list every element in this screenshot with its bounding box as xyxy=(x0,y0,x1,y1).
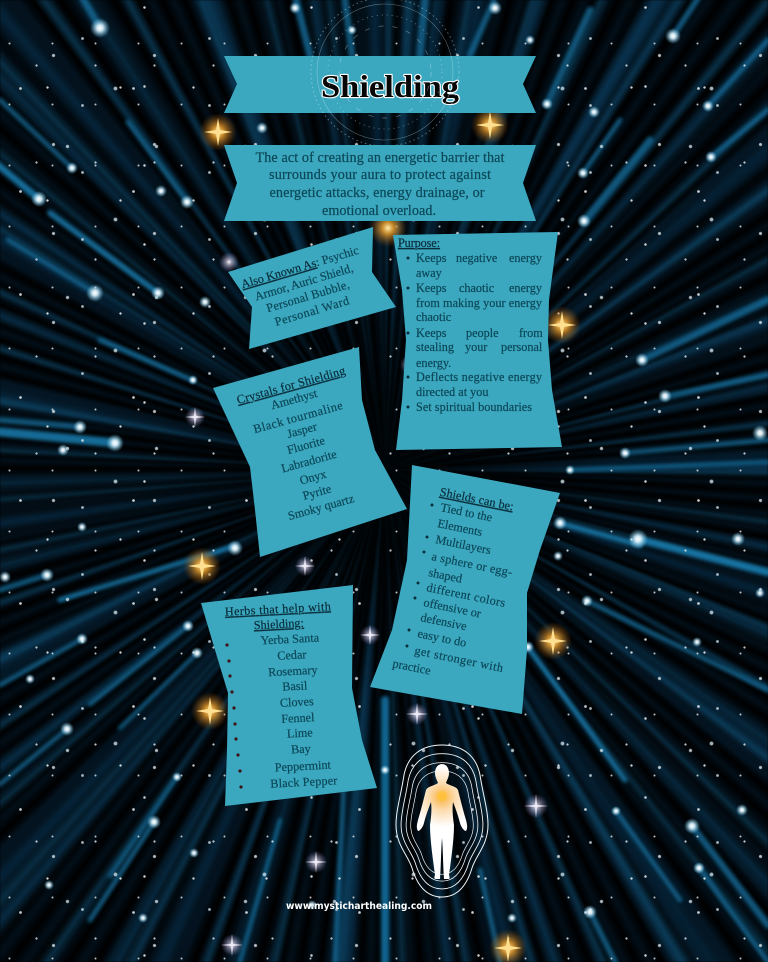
crystals list: Pyrite xyxy=(301,482,333,503)
also known as text: Armor, Auric Shield, xyxy=(253,261,355,303)
icon: gold sparkles xyxy=(183,106,581,962)
crystals list: Jasper xyxy=(285,419,318,441)
shields list: shaped xyxy=(427,565,463,586)
crystals list: Labradorite xyxy=(280,447,338,475)
crystals list: Smoky quartz xyxy=(286,491,356,523)
crystals list: Amethyst xyxy=(269,386,319,412)
purpose list: Keeps xyxy=(416,251,447,265)
crystals list xyxy=(252,386,356,523)
purpose list: away xyxy=(416,266,443,280)
purpose list: directed at you xyxy=(416,385,488,399)
shields list: Multilayers xyxy=(434,532,493,557)
herbs list: Bay xyxy=(291,741,312,757)
purpose list: from xyxy=(519,326,543,340)
figure silhouette xyxy=(417,764,467,879)
definition text: The act of creating an energetic barrier that xyxy=(256,150,505,166)
purpose list: from making your energy xyxy=(416,296,543,310)
purpose list: chaotic xyxy=(459,281,495,295)
decorative mandala circle xyxy=(311,0,459,146)
panel: purpose xyxy=(393,232,562,450)
herbs list xyxy=(225,630,338,791)
panel: crystals xyxy=(213,347,407,557)
also known as text: Personal Bubble, xyxy=(265,277,351,315)
herbs list: Cloves xyxy=(280,694,314,710)
shields list xyxy=(391,500,514,678)
purpose list: energy xyxy=(509,281,543,295)
also known as text: Also Known As: Psychic xyxy=(239,243,361,291)
herbs list: Rosemary xyxy=(268,663,319,679)
panel: herbs xyxy=(201,585,377,806)
purpose list: people xyxy=(466,326,498,340)
definition text: emotional overload. xyxy=(322,203,436,219)
crystals list: Fluorite xyxy=(285,433,326,457)
purpose list: your xyxy=(465,340,487,354)
purpose list: stealing xyxy=(416,340,454,354)
crystals heading: Crystals for Shielding xyxy=(235,363,347,407)
also known as text xyxy=(239,243,361,329)
herbs list: Basil xyxy=(282,678,308,694)
shields list: Elements xyxy=(436,516,484,539)
herbs list: Peppermint xyxy=(274,758,332,774)
shields list: offensive or xyxy=(422,595,482,621)
herbs list: Yerba Santa xyxy=(260,630,320,648)
shields list: different colors xyxy=(425,580,507,610)
purpose list: negative xyxy=(456,251,497,265)
website url: www.mysticharthealing.com xyxy=(286,901,432,912)
icon: violet sparkles xyxy=(185,252,548,956)
herbs heading: Shielding: xyxy=(253,616,304,632)
purpose list: Set spiritual boundaries xyxy=(416,400,532,414)
shields list: defensive xyxy=(419,610,468,633)
panel: shields can be xyxy=(370,465,560,714)
crystals list: Black tourmaline xyxy=(252,398,344,436)
purpose list xyxy=(406,251,543,414)
herbs list: Lime xyxy=(287,725,313,741)
purpose list: chaotic xyxy=(416,310,452,324)
purpose list: energy. xyxy=(416,356,451,370)
panel: also known as xyxy=(228,227,396,349)
herbs list: Cedar xyxy=(277,647,307,663)
herbs list: Fennel xyxy=(281,710,315,726)
title: Shielding xyxy=(321,68,459,104)
purpose list: Keeps xyxy=(416,281,447,295)
crystals list: Onyx xyxy=(298,467,328,488)
shields list: easy to do xyxy=(416,626,468,650)
purpose list: energy xyxy=(509,251,543,265)
definition banner xyxy=(224,145,536,221)
shields heading: Shields can be: xyxy=(439,485,515,513)
definition text xyxy=(256,150,505,219)
definition text: surrounds your aura to protect against xyxy=(269,167,491,183)
herbs heading xyxy=(224,599,331,632)
shields list: get stronger with xyxy=(413,643,504,675)
definition text: energetic attacks, energy drainage, or xyxy=(270,185,485,201)
shields list: practice xyxy=(391,656,432,678)
shields list: Tied to the xyxy=(439,500,494,524)
icon: human body with aura xyxy=(396,745,488,897)
purpose heading: Purpose: xyxy=(398,236,440,250)
shields list: a sphere or egg- xyxy=(430,549,514,579)
purpose list: Deflects negative energy xyxy=(416,370,543,384)
herbs list: Black Pepper xyxy=(270,773,338,791)
purpose list: Keeps xyxy=(416,326,447,340)
also known as text: Personal Ward xyxy=(273,293,351,329)
herbs heading: Herbs that help with xyxy=(224,599,331,619)
title banner xyxy=(224,56,536,113)
purpose list: personal xyxy=(501,340,543,354)
heart glow xyxy=(437,791,447,801)
